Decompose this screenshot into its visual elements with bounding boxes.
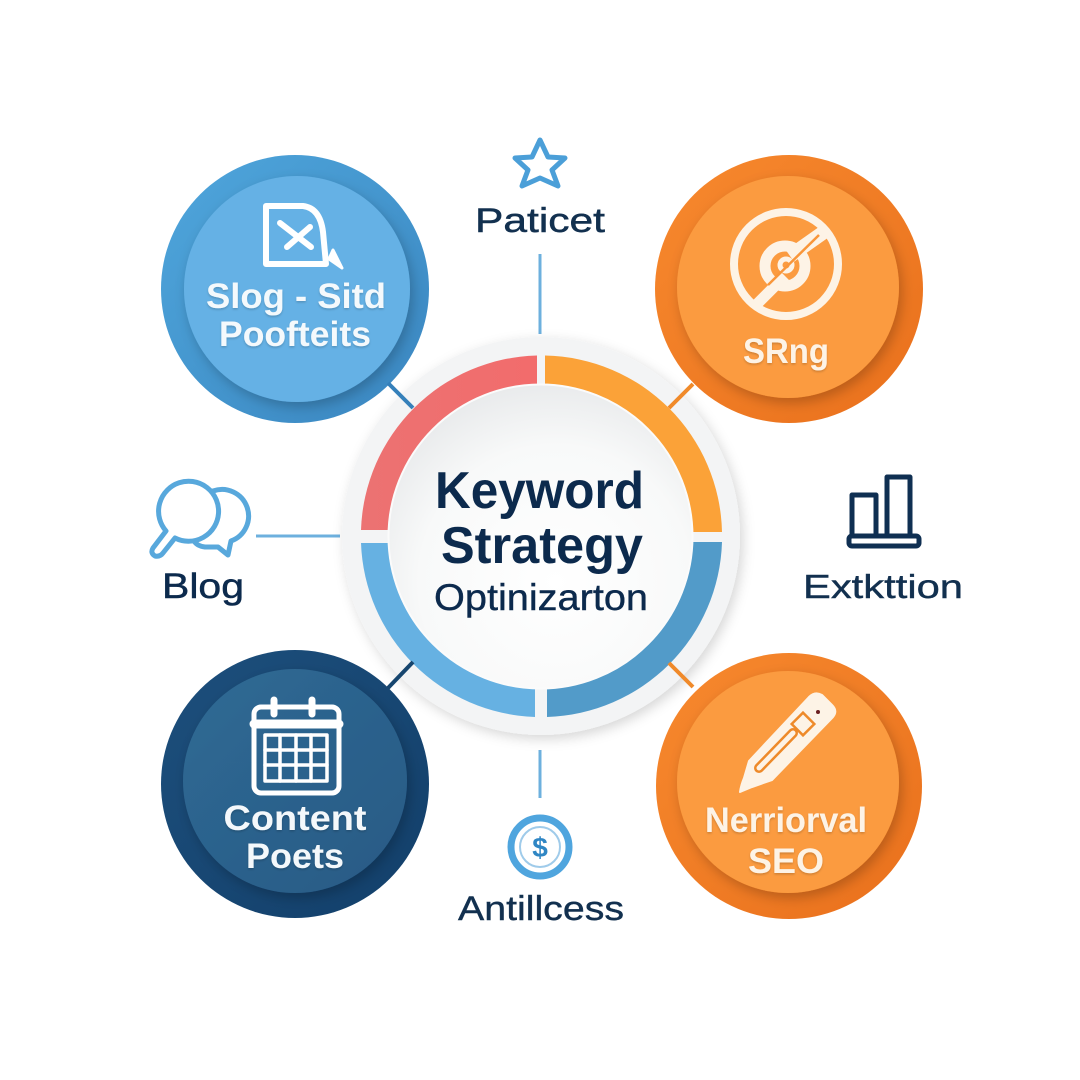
icon: calendar [254, 700, 339, 793]
label: Paticet: Paticet [475, 202, 606, 240]
connector: top right [669, 384, 693, 408]
icon: dollar coin [511, 818, 569, 876]
icon: speech bubbles [152, 481, 249, 556]
text: Content Poets: Content [224, 799, 367, 838]
icon: bar chart [849, 477, 919, 546]
label: Antillcess: Antillcess [458, 890, 624, 928]
label: Extkttion: Extkttion [803, 568, 963, 605]
text: SRng: SRng [743, 332, 829, 371]
hub centre disc [388, 384, 692, 688]
icon: prohibited target [734, 212, 838, 316]
panel: top right orange circle [655, 155, 923, 423]
text: hub title [434, 462, 648, 618]
panel: top left blue circle: Poofteits [219, 315, 371, 354]
label: Blog: Blog [162, 567, 244, 606]
connector: bottom left [388, 662, 413, 688]
icon: star [515, 140, 565, 186]
connector: top left [388, 383, 413, 408]
icon: pencil [740, 693, 835, 792]
text: hub title: Keyword [435, 462, 644, 520]
icon: dollar coin: $ [532, 832, 548, 863]
connector: bottom right [669, 663, 693, 687]
hub outer ring [342, 337, 740, 735]
text: Nerriorval SEO: Nerriorval [705, 801, 867, 840]
ring segment: red [361, 356, 537, 530]
icon: document with cross [266, 206, 342, 268]
panel: bottom left navy circle: Poets [246, 837, 344, 876]
panel: top left blue circle [161, 155, 429, 423]
ring segment: amber [545, 356, 722, 532]
ring segment: steel blue [547, 542, 722, 717]
panel: bottom right orange circle: SEO [748, 842, 824, 881]
text: hub title: Strategy [441, 517, 643, 575]
text: Slog - Sitd Poofteits: Slog - Sitd [206, 277, 386, 316]
connector lines: spokes [256, 254, 832, 798]
panel: bottom right orange circle [656, 653, 922, 919]
ring segment: light blue [361, 543, 535, 717]
panel: bottom left navy circle [161, 650, 429, 918]
panel: central hub [342, 337, 740, 735]
text: hub title: Optinizarton [434, 577, 648, 618]
